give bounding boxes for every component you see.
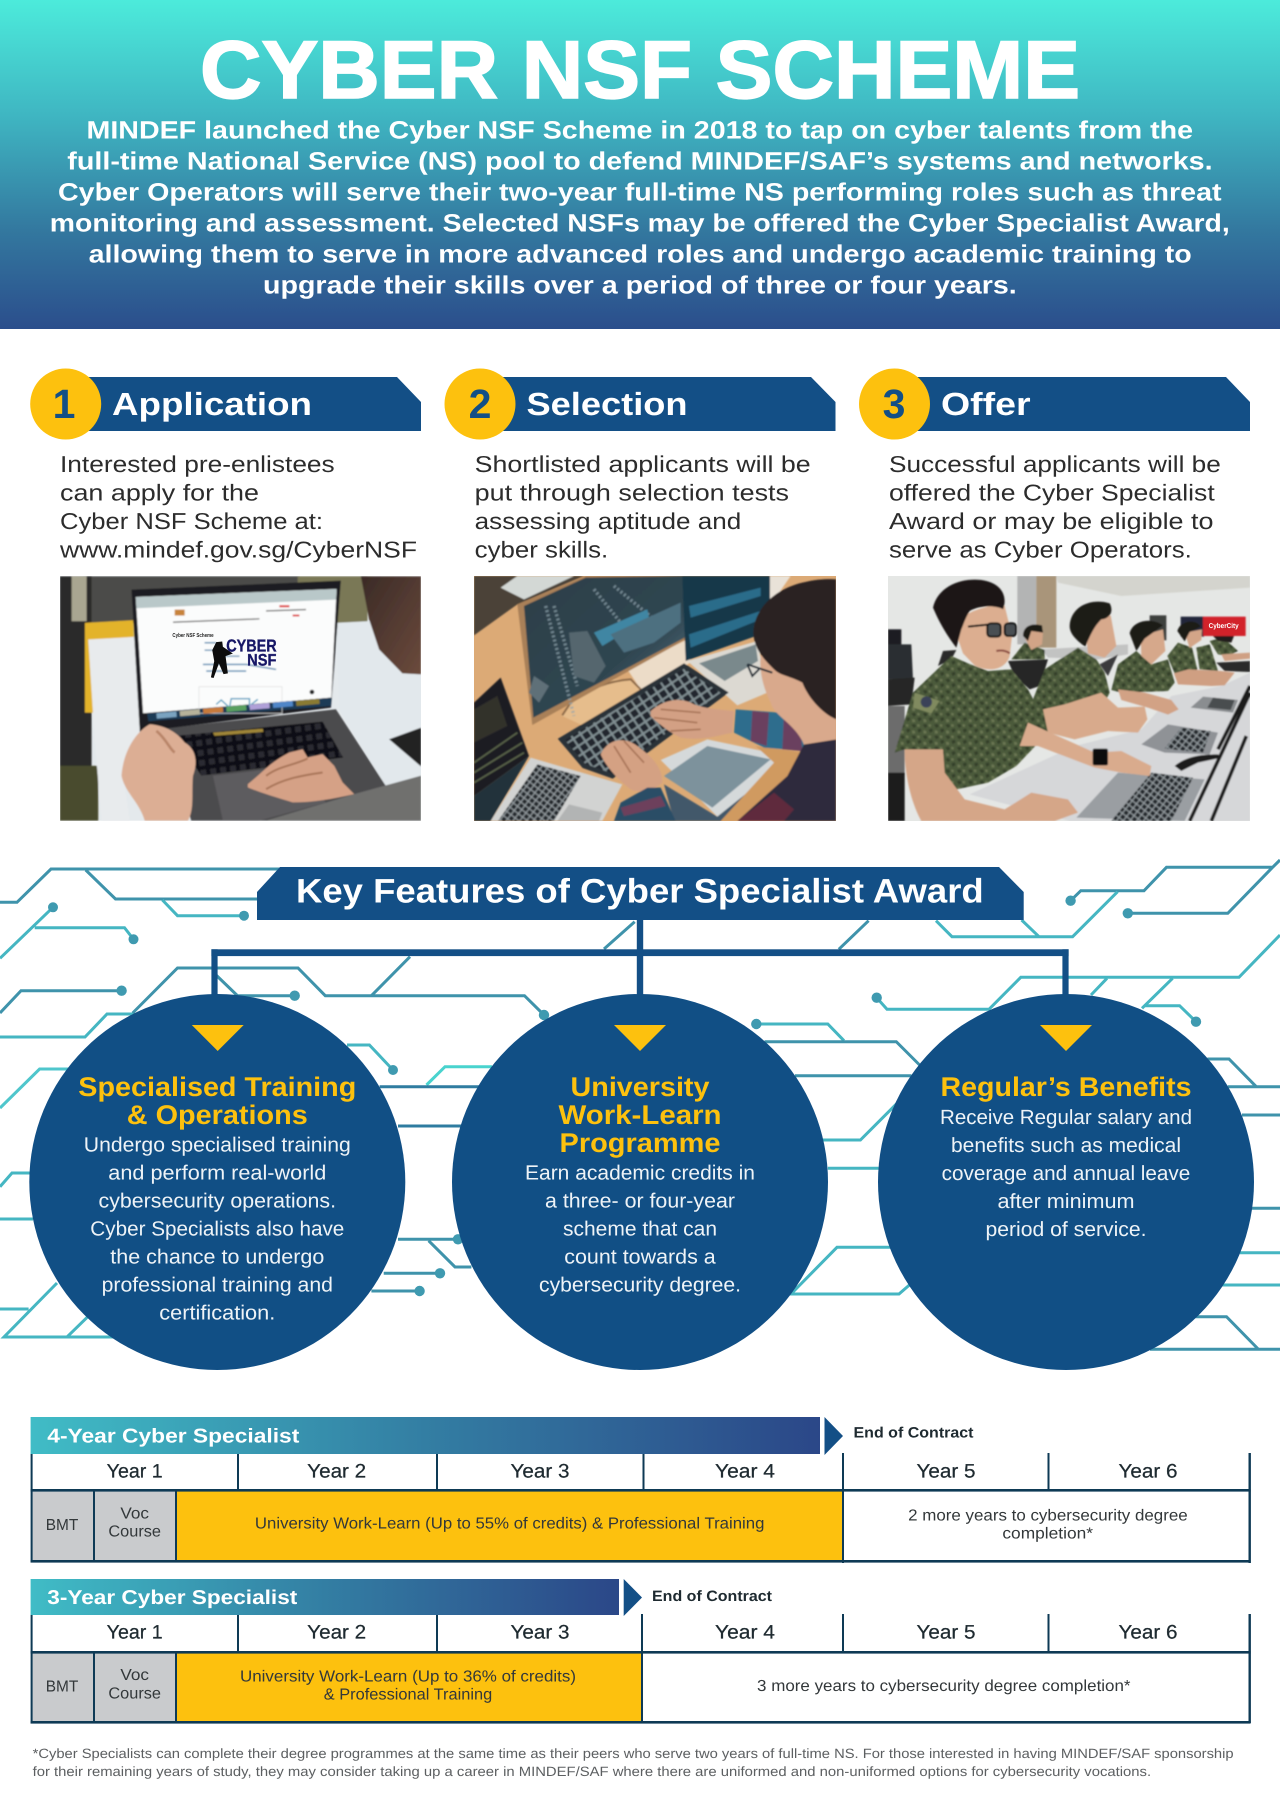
fills: 4-year phases	[32, 1491, 843, 1560]
title: CYBER NSF SCHEME	[200, 25, 1080, 116]
photo: NSFs in uniform at laptops	[888, 576, 1250, 821]
table lines: 3-year	[31, 1614, 1251, 1724]
bar: 3-year: 3-Year Cyber Specialist	[47, 1587, 298, 1609]
text: specialised training: the chance to undergo	[110, 1246, 324, 1268]
year labels: 3-year: Year 3	[510, 1622, 570, 1644]
arrow: end of contract 4-year	[824, 1417, 843, 1455]
cell text: 3-year: Voc	[120, 1667, 149, 1684]
text: application: Interested pre-enlistees	[60, 451, 335, 477]
year labels: 4-year: Year 1	[107, 1460, 163, 1482]
text: application: Cyber NSF Scheme at:	[60, 508, 323, 534]
footnote: for their remaining years of study, they may consider taking up a career in MINDEF/SAF where there are uniformed and non-uniformed options for cybersecurity vocations.	[33, 1764, 1151, 1779]
text: selection: Shortlisted applicants will be	[475, 451, 811, 477]
cell text: 4-year: Course	[108, 1523, 161, 1540]
timeline: 4-year cyber specialist	[31, 1417, 1251, 1563]
feature circle: specialised training and operations	[29, 994, 405, 1370]
cell text: 4-year: 2 more years to cybersecurity degree	[908, 1508, 1188, 1525]
banner: selection	[444, 368, 836, 440]
label: end of contract 4-year: End of Contract	[854, 1424, 974, 1441]
heading: university work-learn: Work-Learn	[558, 1100, 722, 1130]
footnote: *Cyber Specialists can complete their degree programmes at the same time as their peers who serve two years of full-time NS. For those interested in having MINDEF/SAF sponsorship	[33, 1746, 1234, 1761]
feature circle: regular's benefits	[878, 994, 1254, 1370]
label: end of contract 3-year: End of Contract	[652, 1588, 772, 1605]
fills: 3-year phases	[32, 1653, 642, 1721]
year labels: 3-year: Year 5	[916, 1622, 976, 1644]
text: offer: serve as Cyber Operators.	[889, 536, 1192, 562]
banner: selection: 2	[469, 381, 491, 427]
photo: laptop showing Cyber NSF web page: CYBER	[226, 636, 277, 655]
feature circle: university work-learn programme	[452, 994, 828, 1370]
text: university work-learn: scheme that can	[563, 1218, 717, 1240]
banner: application: 1	[53, 381, 75, 427]
text: regular's benefits: coverage and annual leave	[942, 1162, 1190, 1185]
year labels: 4-year: Year 3	[510, 1460, 570, 1482]
intro paragraph: Cyber Operators will serve their two-year full-time NS performing roles such as threat	[58, 178, 1222, 206]
year labels: 4-year: Year 4	[715, 1460, 775, 1482]
photo: laptop showing Cyber NSF web page: NSF	[247, 650, 276, 669]
heading: university work-learn: Programme	[560, 1128, 720, 1158]
cell text: 3-year: & Professional Training	[324, 1686, 492, 1703]
arrow: end of contract 3-year	[624, 1579, 642, 1616]
step 2: selection	[444, 368, 836, 821]
heading: specialised training	[78, 1072, 356, 1130]
cell text: 3-year: BMT	[46, 1679, 79, 1696]
cell text: 3-year: 3 more years to cybersecurity degree completion*	[757, 1678, 1131, 1695]
text: specialised training: cybersecurity operations.	[99, 1190, 336, 1212]
text: specialised training: professional training and	[102, 1274, 333, 1296]
icon: down triangle	[614, 1025, 666, 1051]
text: regular's benefits: Receive Regular salary and	[940, 1106, 1192, 1129]
heading: university work-learn	[558, 1072, 722, 1158]
header panel	[0, 0, 1280, 329]
step 3: offer	[859, 368, 1250, 821]
intro paragraph: upgrade their skills over a period of three or four years.	[263, 272, 1017, 300]
heading: specialised training: Specialised Training	[78, 1072, 356, 1102]
year labels: 3-year: Year 1	[107, 1622, 163, 1644]
circuit board background	[0, 860, 1280, 1349]
photo: NSFs in uniform at laptops: CyberCity	[1209, 622, 1239, 630]
text: specialised training: Undergo specialised training	[84, 1134, 351, 1156]
text: selection: put through selection tests	[475, 480, 789, 506]
photo: laptop showing Cyber NSF web page	[60, 576, 421, 821]
text: regular's benefits	[940, 1106, 1192, 1241]
text: regular's benefits: benefits such as medical	[951, 1134, 1181, 1157]
year labels: 3-year: Year 2	[307, 1622, 366, 1644]
year labels: 3-year	[107, 1622, 1178, 1644]
banner: offer: 3	[883, 381, 905, 427]
text: specialised training: and perform real-world	[108, 1162, 326, 1184]
soldier silhouette	[211, 641, 233, 678]
intro paragraph: full-time National Service (NS) pool to defend MINDEF/SAF’s systems and networks.	[67, 148, 1213, 176]
intro paragraph: MINDEF launched the Cyber NSF Scheme in 2018 to tap on cyber talents from the	[86, 116, 1193, 144]
cell text: 4-year: Voc	[120, 1505, 149, 1522]
bar: 4-year	[31, 1417, 820, 1454]
text: offer: Successful applicants will be	[889, 451, 1221, 477]
year labels: 3-year: Year 4	[715, 1622, 775, 1644]
text: regular's benefits: after minimum	[998, 1190, 1134, 1213]
text: application	[59, 451, 417, 562]
text: selection	[475, 451, 811, 562]
year labels: 4-year: Year 2	[307, 1460, 366, 1482]
table lines: 4-year	[31, 1453, 1251, 1563]
text: university work-learn: a three- or four-year	[545, 1190, 735, 1212]
text: application: www.mindef.gov.sg/CyberNSF	[59, 536, 417, 562]
text: offer: offered the Cyber Specialist	[889, 480, 1215, 506]
intro paragraph: monitoring and assessment. Selected NSFs may be offered the Cyber Specialist Award,	[50, 210, 1230, 238]
text: regular's benefits: period of service.	[986, 1218, 1146, 1241]
banner: offer	[859, 368, 1250, 440]
banner: application: Application	[112, 386, 312, 422]
text: selection: cyber skills.	[475, 536, 608, 562]
year labels: 4-year: Year 6	[1118, 1460, 1178, 1482]
text: university work-learn: Earn academic credits in	[525, 1162, 755, 1184]
banner: selection: Selection	[526, 386, 688, 422]
cell text: 3-year	[46, 1667, 1131, 1703]
text: university work-learn	[525, 1162, 755, 1296]
footnote	[33, 1746, 1234, 1779]
text: application: can apply for the	[60, 480, 259, 506]
cell text: 3-year: Course	[108, 1685, 161, 1702]
heading: specialised training: & Operations	[127, 1100, 308, 1130]
text: selection: assessing aptitude and	[475, 508, 741, 534]
step 1: application	[30, 368, 421, 821]
text: university work-learn: count towards a	[564, 1246, 716, 1268]
year labels: 4-year	[107, 1460, 1178, 1482]
text: specialised training: certification.	[159, 1302, 275, 1324]
heading: regular's benefits: Regular’s Benefits	[940, 1072, 1192, 1102]
text: specialised training: Cyber Specialists also have	[90, 1218, 344, 1240]
icon: down triangle	[1040, 1025, 1092, 1051]
cell text: 4-year	[46, 1505, 1188, 1543]
year labels: 3-year: Year 6	[1118, 1622, 1178, 1644]
heading: university work-learn: University	[570, 1072, 710, 1102]
intro paragraph: allowing them to serve in more advanced roles and undergo academic training to	[89, 240, 1192, 268]
cell text: 4-year: completion*	[1002, 1526, 1093, 1543]
photo: programmer at keyboards	[474, 576, 836, 821]
bar: 4-year: 4-Year Cyber Specialist	[47, 1426, 300, 1448]
banner: application	[30, 368, 421, 440]
text: offer: Award or may be eligible to	[889, 508, 1214, 534]
text: university work-learn: cybersecurity degree.	[539, 1274, 741, 1296]
connector tree	[211, 920, 1069, 999]
year labels: 4-year: Year 5	[916, 1460, 976, 1482]
text: specialised training	[84, 1134, 351, 1324]
bar: 3-year	[31, 1579, 619, 1615]
heading: key features of Cyber Specialist Award	[257, 867, 1024, 920]
intro paragraph	[50, 116, 1230, 300]
timeline: 3-year cyber specialist	[31, 1579, 1251, 1724]
photo: laptop showing Cyber NSF web page: Cyber NSF Scheme	[172, 632, 214, 638]
icon: down triangle	[192, 1025, 244, 1051]
text: offer	[889, 451, 1221, 562]
banner: offer: Offer	[941, 386, 1031, 422]
cell text: 3-year: University Work-Learn (Up to 36% of credits)	[240, 1669, 576, 1686]
cell text: 4-year: University Work-Learn (Up to 55% of credits) & Professional Training	[255, 1515, 764, 1532]
cell text: 4-year: BMT	[46, 1517, 79, 1534]
heading: key features of Cyber Specialist Award: Key Features of Cyber Specialist Award	[296, 872, 984, 910]
